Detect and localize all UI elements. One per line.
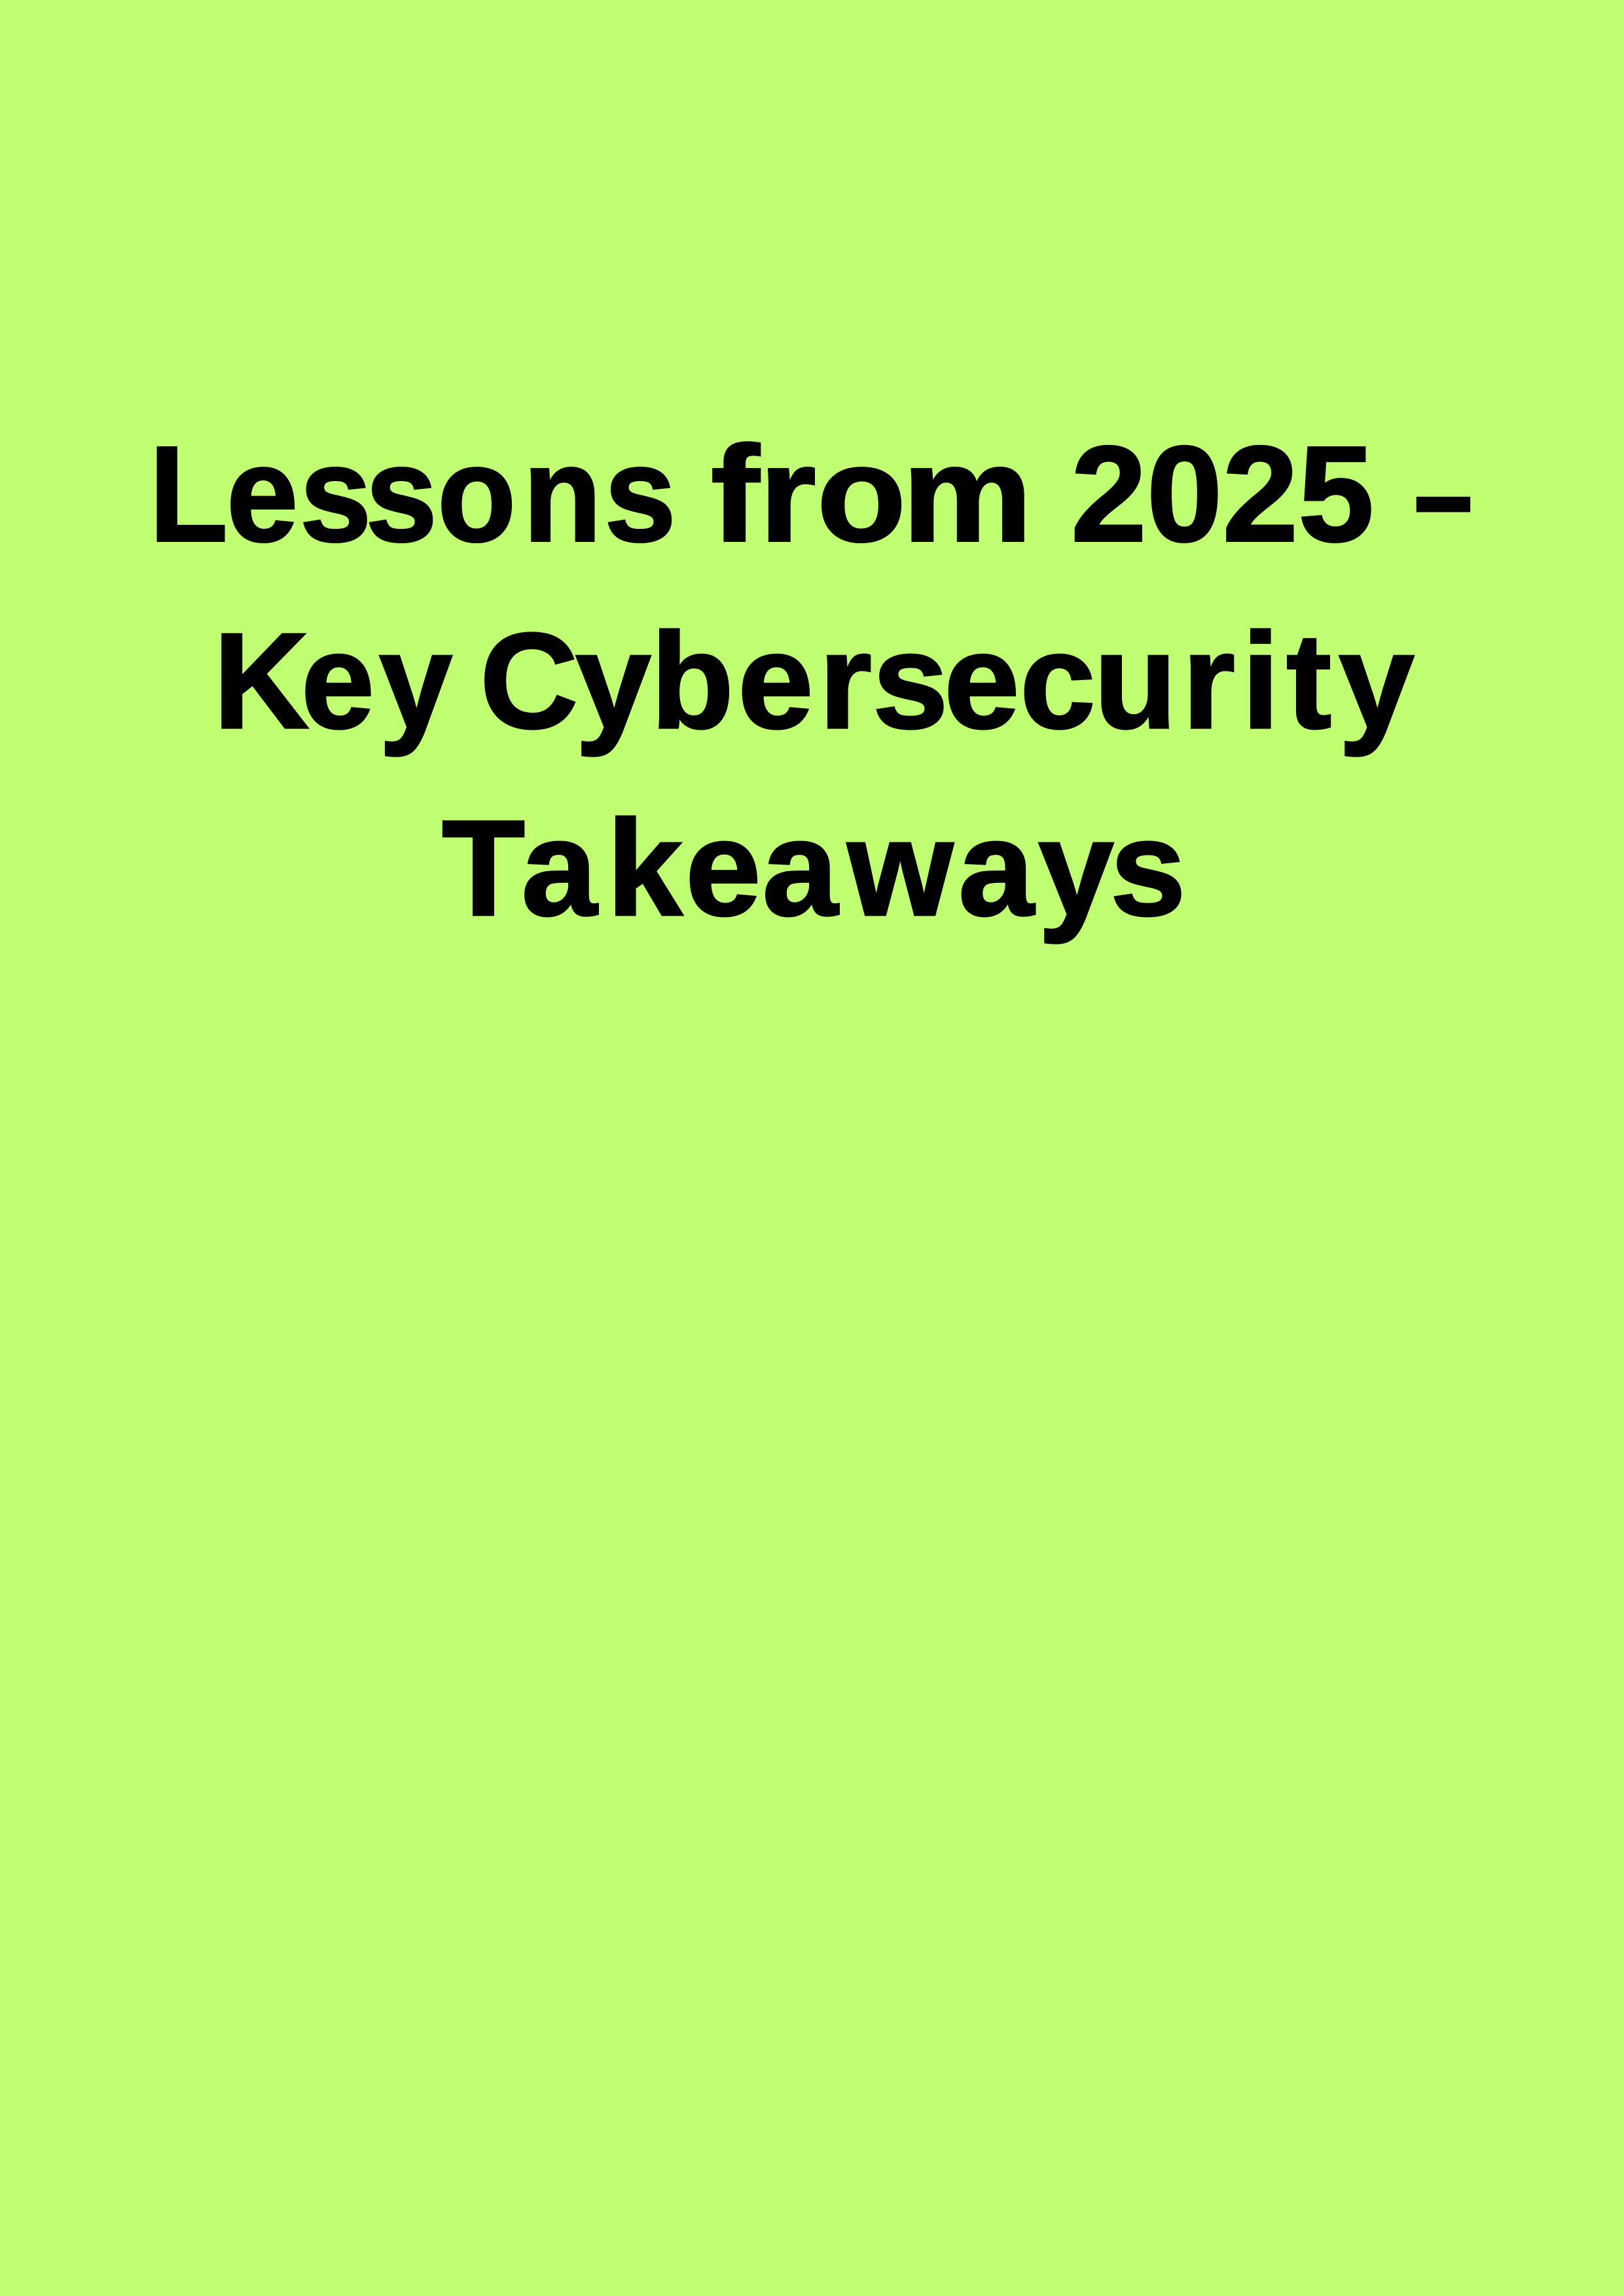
title: 2025	[1071, 419, 1374, 571]
title: Lessons	[149, 418, 676, 570]
title: from	[711, 418, 1032, 570]
title: –	[1414, 419, 1473, 571]
title: Cybersecurity	[480, 605, 1415, 757]
title	[149, 418, 1473, 944]
title: Takeaways	[442, 793, 1186, 944]
title: Key	[213, 605, 452, 757]
